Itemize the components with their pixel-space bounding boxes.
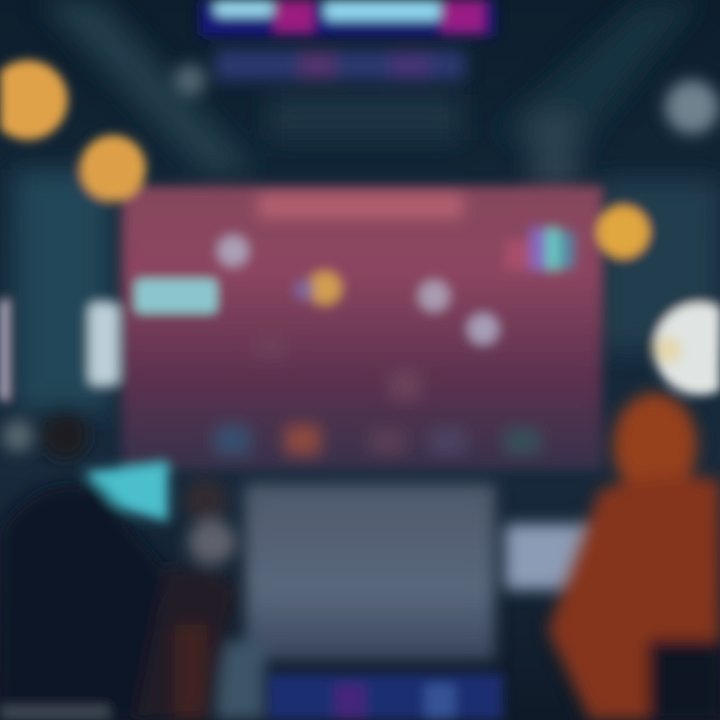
top neon screen [200, 0, 495, 36]
right wall [600, 180, 720, 350]
bottom neon screen [268, 674, 503, 720]
main wall panel [122, 186, 602, 470]
grey blob left [2, 420, 34, 452]
ceiling orb small [174, 64, 206, 96]
orange light 3 [597, 206, 649, 258]
person right orange [548, 393, 720, 720]
far left edge glow [0, 300, 8, 400]
lower floor desk [245, 484, 495, 660]
panel nodes [217, 235, 499, 345]
left white panel [88, 302, 120, 386]
ceiling beams [40, 0, 700, 190]
colour chip [505, 228, 574, 270]
neon sub strip [215, 50, 465, 80]
orange light 1 [0, 60, 68, 140]
left pillar [15, 170, 110, 410]
ceiling orb top right [665, 80, 719, 134]
bottom left dark strip [0, 705, 110, 720]
white orb right [654, 303, 720, 395]
cyan screen [85, 462, 168, 522]
cyan label [135, 279, 217, 313]
person left [0, 412, 170, 720]
person middle [135, 478, 238, 720]
right tablet [505, 524, 600, 590]
panel title [258, 194, 463, 218]
faint lower panel marks [215, 335, 540, 455]
orange light 2 [80, 135, 146, 201]
floor left strip [215, 640, 265, 720]
